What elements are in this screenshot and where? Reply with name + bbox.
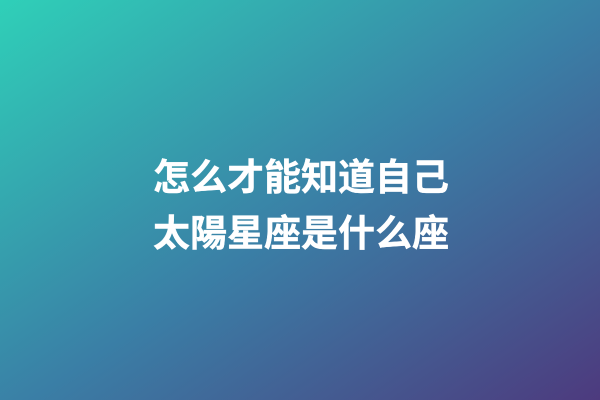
title: 怎么才能知道自己 bbox=[153, 157, 449, 198]
title: 太陽星座是什么座 bbox=[153, 213, 449, 254]
title bbox=[153, 157, 449, 254]
